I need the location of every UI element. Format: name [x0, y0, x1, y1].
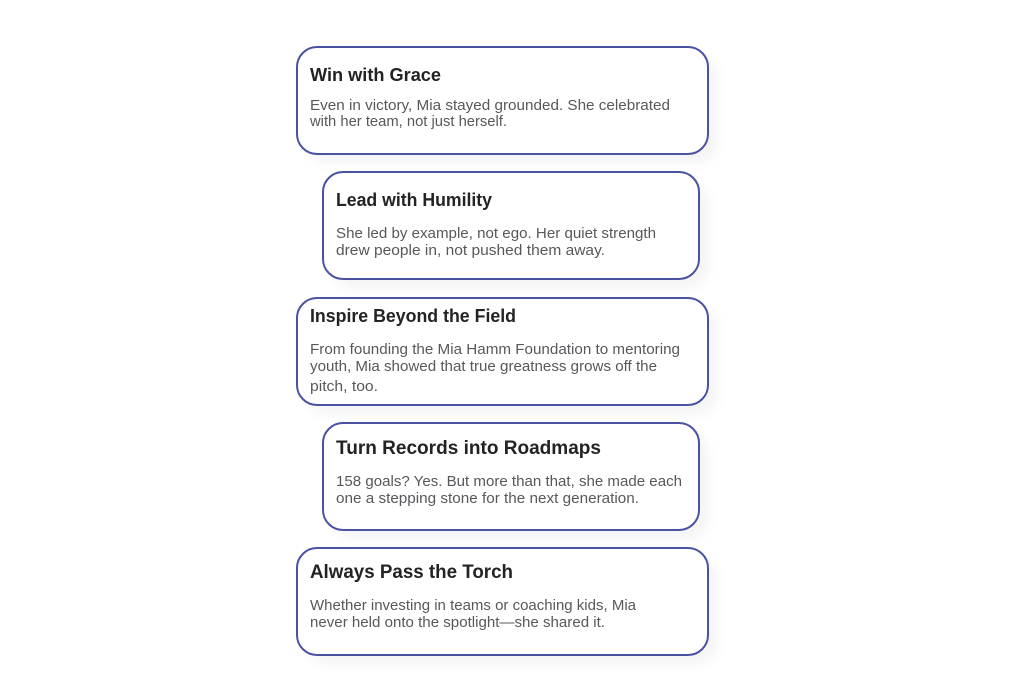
- text block: Turn Records into Roadmaps body: [336, 474, 682, 507]
- text block: Inspire Beyond the Field body: pitch, too.: [310, 379, 378, 395]
- panel: Win with Grace: [297, 47, 718, 164]
- text block: Lead with Humility body: She led by example, not ego. Her quiet strength: [336, 226, 656, 242]
- text block: Lead with Humility body: [336, 226, 656, 259]
- text block: Inspire Beyond the Field body: [310, 342, 680, 395]
- panel: Lead with Humility: [323, 172, 709, 289]
- text block: Win with Grace body: with her team, not just herself.: [309, 114, 507, 130]
- panel: Turn Records into Roadmaps: [323, 423, 709, 540]
- heading: Inspire Beyond the Field: Inspire Beyond the Field: [310, 306, 516, 326]
- heading: Win with Grace: Win with Grace: [310, 65, 441, 85]
- panel: Inspire Beyond the Field: [297, 298, 718, 415]
- panel: Always Pass the Torch: [297, 548, 718, 665]
- heading: Lead with Humility: Lead with Humility: [336, 190, 492, 210]
- text block: Inspire Beyond the Field body: youth, Mia showed that true greatness grows off the: [310, 359, 657, 375]
- text block: Always Pass the Torch body: [310, 598, 637, 631]
- text block: Always Pass the Torch body: Whether investing in teams or coaching kids, Mia: [310, 598, 637, 614]
- text block: Turn Records into Roadmaps body: one a stepping stone for the next generation.: [336, 491, 639, 507]
- text block: Inspire Beyond the Field body: From founding the Mia Hamm Foundation to mentoring: [310, 342, 680, 358]
- text block: Win with Grace body: [309, 98, 670, 130]
- text block: Turn Records into Roadmaps body: 158 goals? Yes. But more than that, she made each: [336, 474, 682, 490]
- text block: Lead with Humility body: drew people in, not pushed them away.: [336, 243, 605, 259]
- text block: Win with Grace body: Even in victory, Mia stayed grounded. She celebrated: [310, 98, 670, 114]
- heading: Always Pass the Torch: Always Pass the Torch: [310, 562, 513, 583]
- text block: Always Pass the Torch body: never held onto the spotlight—she shared it.: [310, 615, 605, 631]
- heading: Turn Records into Roadmaps: Turn Records into Roadmaps: [336, 438, 601, 459]
